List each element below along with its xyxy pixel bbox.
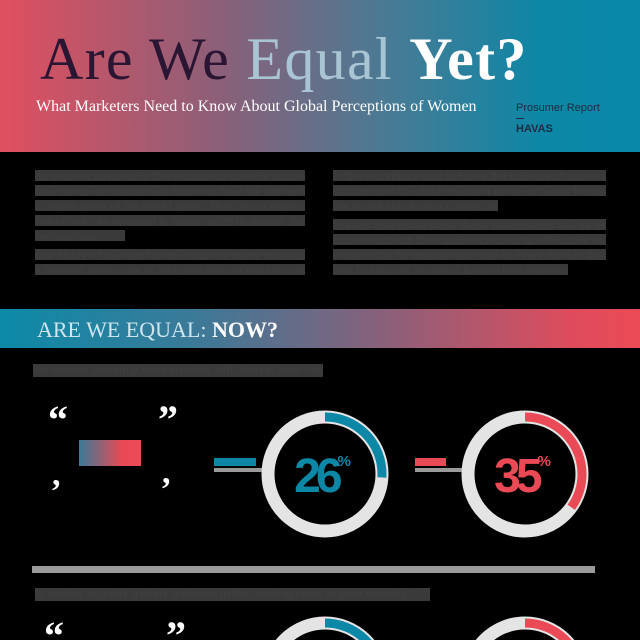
intro text column 2 — [333, 170, 606, 275]
donut: 35% — [462, 410, 588, 538]
icon: quotes with gradient bar — [48, 397, 178, 493]
subtitle: What Marketers Need to Know About Global Perceptions of Women — [36, 98, 477, 115]
section banner — [0, 309, 640, 348]
intro text column 1 — [35, 170, 305, 275]
icon: quotes with gradient bar: ” — [158, 397, 178, 442]
title: Are We Equal Yet? — [40, 26, 528, 92]
donut: 26%: % — [338, 453, 351, 470]
brand — [516, 102, 600, 135]
icon: quotes with gradient bar: , — [162, 454, 170, 491]
icon: quotes row 2 — [44, 616, 185, 640]
donut: 26%: 26 — [294, 450, 338, 503]
donut: 35%: % — [538, 453, 551, 470]
donut: 35%: 35 — [494, 450, 538, 503]
legend: men — [214, 458, 262, 472]
brand: Prosumer Report — [516, 102, 600, 114]
donuts row 2 — [276, 616, 574, 640]
icon: quotes with gradient bar: “ — [48, 397, 68, 442]
brand: HAVAS — [516, 123, 553, 135]
question 2: Is gender equality a likely outcome in the coming years in your country? — [35, 588, 413, 600]
header — [0, 0, 640, 152]
legend: women — [415, 458, 462, 472]
section banner: ARE WE EQUAL: NOW? — [37, 317, 278, 342]
icon: quotes with gradient bar: , — [52, 456, 60, 493]
donut: 26% — [262, 410, 388, 538]
